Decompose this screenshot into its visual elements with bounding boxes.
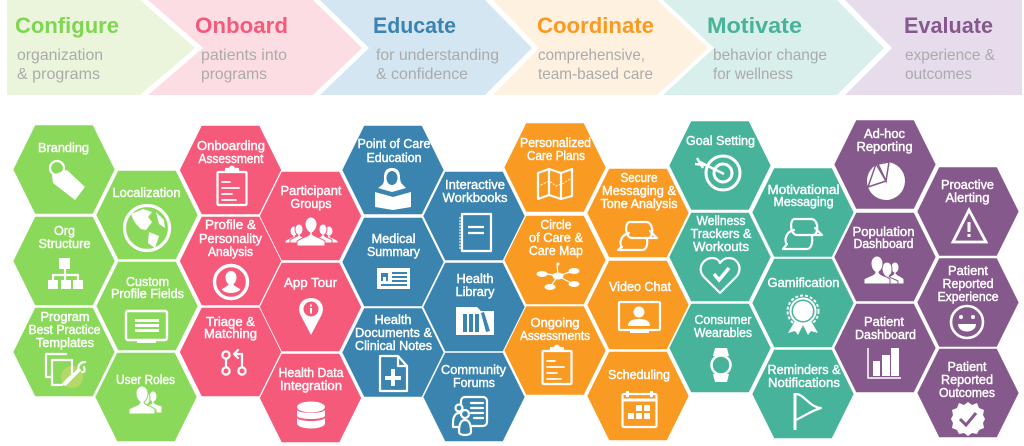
hexagon: Patient Reported Experience: Reported bbox=[942, 277, 994, 291]
chevron: Configure: organization bbox=[17, 47, 103, 64]
chevron: Motivate bbox=[663, 0, 884, 95]
hexagon: Point of Care Education bbox=[342, 126, 444, 214]
hexagon: Secure Messaging and Tone Analysis bbox=[587, 168, 689, 258]
chevron: Coordinate: Coordinate bbox=[537, 13, 654, 38]
icon: globe bbox=[124, 206, 170, 250]
hexagon: Triage and Matching bbox=[180, 308, 282, 396]
hexagon: Health Library: Library bbox=[456, 285, 495, 299]
hexagon: Proactive Alerting: Proactive bbox=[941, 178, 994, 192]
chevron: Coordinate: comprehensive, bbox=[538, 47, 645, 64]
hexagon: Triage and Matching: Matching bbox=[204, 327, 257, 341]
chevron: Coordinate: team-based care bbox=[538, 66, 653, 83]
icon: heart check bbox=[701, 258, 739, 293]
hexagon: Population Dashboard bbox=[834, 212, 936, 302]
hexagon: Program Best Practice Templates bbox=[13, 308, 115, 396]
hexagon: Patient Reported Outcomes: Patient bbox=[948, 360, 987, 374]
hexagon: Patient Reported Outcomes: Outcomes bbox=[939, 386, 995, 400]
icon: warning triangle bbox=[953, 210, 986, 242]
hexagon: Secure Messaging and Tone Analysis: Tone Analysis bbox=[600, 197, 678, 211]
hexagon: Program Best Practice Templates: Best Practice bbox=[28, 323, 101, 337]
icon: reader with book bbox=[375, 168, 411, 210]
hexagon: Personalized Care Plans bbox=[504, 123, 606, 212]
hexagon: Branding: Branding bbox=[38, 141, 89, 155]
hexagon: Circle of Care and Care Map: Care Map bbox=[529, 244, 583, 258]
hexagon: User Roles: User Roles bbox=[116, 373, 175, 387]
hexagon: Onboarding Assessment bbox=[180, 126, 282, 214]
hexagon: Health Documents and Clinical Notes: Documents & bbox=[355, 326, 433, 340]
hexagon: Gamification: Gamification bbox=[768, 276, 840, 290]
icon: org chart bbox=[48, 258, 83, 289]
hexagon: Medical Summary: Summary bbox=[367, 245, 421, 259]
hexagon: Patient Reported Experience: Patient bbox=[948, 264, 989, 278]
hexagon: Org Structure: Structure bbox=[38, 237, 91, 251]
hexagon: Point of Care Education: Education bbox=[366, 151, 422, 165]
icon: profile circle bbox=[214, 266, 248, 298]
hexagon: Scheduling: Scheduling bbox=[608, 368, 670, 382]
hexagon: Medical Summary bbox=[342, 218, 444, 306]
hexagon: Community Forums: Community bbox=[441, 363, 507, 377]
icon: ID card bbox=[377, 268, 410, 289]
icon: pie chart bbox=[867, 162, 905, 200]
hexagon: Consumer Wearables bbox=[669, 304, 771, 392]
icon: users bbox=[129, 386, 162, 414]
chevron: Evaluate: Evaluate bbox=[904, 13, 993, 38]
stage banner bbox=[7, 0, 1022, 95]
chevron: Educate: for understanding bbox=[376, 47, 499, 64]
chevron: Onboard bbox=[148, 0, 362, 95]
hexagon: Custom Profile Fields: Profile Fields bbox=[111, 287, 184, 301]
hexagon: Personalized Care Plans: Care Plans bbox=[527, 149, 585, 163]
chevron: Educate: & confidence bbox=[376, 66, 468, 83]
hexagon: Scheduling bbox=[587, 352, 689, 440]
chevron: Onboard: programs bbox=[201, 66, 267, 83]
icon: branch arrows bbox=[222, 350, 246, 375]
hexagon: Profile and Personality Analysis bbox=[180, 216, 282, 306]
chevron: Coordinate bbox=[493, 0, 708, 95]
hexagon: Patient Reported Outcomes bbox=[917, 348, 1019, 438]
panel: Coordinate hexagons bbox=[504, 123, 689, 440]
hexagon: Consumer Wearables: Consumer bbox=[694, 313, 752, 327]
hexagon: Video Chat: Video Chat bbox=[609, 280, 672, 294]
hexagon: Goal Setting: Goal Setting bbox=[686, 134, 755, 148]
icon: users bbox=[864, 256, 904, 284]
hexagon: Goal Setting bbox=[669, 121, 771, 210]
hexagon: Program Best Practice Templates: Program bbox=[40, 310, 90, 324]
hexagon: Ongoing Assessments: Assessments bbox=[520, 329, 590, 343]
icon: video monitor bbox=[619, 302, 660, 333]
hexagon: Patient Reported Experience: Experience bbox=[938, 290, 999, 304]
hexagon: Localization bbox=[96, 170, 198, 260]
icon: chat bubbles bbox=[783, 219, 822, 249]
icon: chat bubbles bbox=[618, 222, 657, 250]
chevron: Evaluate: experience & bbox=[905, 47, 995, 64]
hexagon: Health Data Integration bbox=[260, 354, 362, 442]
hexagon: Wellness Trackers and Workouts: Trackers & bbox=[690, 227, 752, 241]
icon: community forum bbox=[453, 397, 487, 435]
hexagon: Interactive Workbooks: Interactive bbox=[445, 178, 505, 192]
hexagon: Interactive Workbooks bbox=[423, 172, 525, 260]
panel: Configure hexagons bbox=[13, 125, 198, 442]
hexagon: Custom Profile Fields bbox=[96, 262, 198, 350]
chevron: Configure: & programs bbox=[17, 66, 100, 83]
icon: document with plus bbox=[380, 356, 407, 391]
hexagon: Org Structure bbox=[13, 216, 115, 306]
hexagon: Proactive Alerting bbox=[917, 167, 1019, 256]
icon: smiley bbox=[951, 306, 983, 338]
hexagon: Patient Reported Outcomes: Reported bbox=[941, 373, 993, 387]
hexagon: Population Dashboard: Dashboard bbox=[854, 237, 914, 251]
chevron: Evaluate: outcomes bbox=[905, 66, 972, 83]
hexagon: App Tour: App Tour bbox=[284, 276, 337, 290]
hexagon: Ongoing Assessments: Ongoing bbox=[530, 316, 580, 330]
hexagon: Wellness Trackers and Workouts: Workouts bbox=[693, 240, 749, 254]
hexagon: Health Data Integration: Health Data bbox=[278, 366, 344, 380]
icon: tag bbox=[50, 161, 85, 200]
hexagon: Patient Dashboard bbox=[834, 304, 936, 392]
hexagon: Localization: Localization bbox=[112, 186, 181, 200]
hexagon: Profile and Personality Analysis: Profile & bbox=[205, 218, 257, 232]
icon: bar chart bbox=[868, 348, 901, 378]
hexagon: Consumer Wearables: Wearables bbox=[694, 326, 752, 340]
panel: Educate hexagons bbox=[342, 126, 525, 442]
hexagon: Patient Dashboard: Patient bbox=[864, 315, 905, 329]
hexagon: Participant Groups: Participant bbox=[280, 184, 342, 198]
hexagon: Custom Profile Fields: Custom bbox=[126, 275, 169, 289]
chevron: Educate bbox=[320, 0, 532, 95]
hexagon: Motivational Messaging: Messaging bbox=[774, 195, 834, 209]
hexagon: Health Library: Health bbox=[456, 272, 494, 286]
hexagon: Circle of Care and Care Map bbox=[504, 216, 606, 304]
icon: database bbox=[297, 402, 325, 428]
icon: templates and wrench bbox=[46, 354, 85, 388]
hexagon: Population Dashboard: Population bbox=[852, 225, 915, 239]
hexagon: Community Forums bbox=[423, 352, 525, 442]
hexagon: Ad-hoc Reporting bbox=[834, 120, 936, 209]
hexagon: Reminders and Notifications bbox=[752, 350, 854, 438]
hexagon: Motivational Messaging bbox=[752, 168, 854, 257]
hexagon: Gamification bbox=[752, 258, 854, 348]
hexagon: Circle of Care and Care Map: Circle bbox=[540, 218, 572, 232]
hexagon: Program Best Practice Templates: Templates bbox=[36, 336, 94, 350]
chevron: Evaluate bbox=[845, 0, 1022, 95]
chevron: Motivate: for wellness bbox=[713, 66, 793, 83]
hexagon: Ongoing Assessments bbox=[504, 306, 606, 395]
icon: award ribbon bbox=[788, 296, 818, 335]
hexagon: Ad-hoc Reporting: Ad-hoc bbox=[864, 127, 905, 141]
hexagon: Onboarding Assessment: Assessment bbox=[198, 152, 264, 166]
icon: care map hub bbox=[536, 262, 580, 290]
hexagon: Org Structure: Org bbox=[54, 224, 75, 238]
hexagon: Circle of Care and Care Map: of Care & bbox=[529, 231, 584, 245]
hexagon: Patient Reported Experience bbox=[917, 258, 1019, 347]
hexagon: Reminders and Notifications: Reminders & bbox=[768, 363, 841, 377]
panel: Onboard hexagons bbox=[180, 126, 362, 442]
hexagon: Health Documents and Clinical Notes bbox=[342, 308, 444, 397]
icon: clipboard bbox=[218, 167, 246, 205]
chevron: Motivate: behavior change bbox=[713, 47, 827, 64]
hexagon: User Roles bbox=[95, 352, 197, 442]
icon: calendar bbox=[622, 391, 656, 427]
hexagon: Interactive Workbooks: Workbooks bbox=[442, 191, 508, 205]
icon: group of people bbox=[285, 217, 338, 246]
hexagon: Health Documents and Clinical Notes: Health bbox=[374, 313, 412, 327]
hexagon: Proactive Alerting: Alerting bbox=[946, 191, 990, 205]
hexagon: Onboarding Assessment: Onboarding bbox=[197, 139, 265, 153]
panel: Evaluate hexagons bbox=[834, 120, 1019, 438]
icon: location pin bbox=[299, 298, 323, 335]
hexagon: Profile and Personality Analysis: Analysis bbox=[208, 245, 253, 259]
icon: verified seal bbox=[951, 402, 985, 436]
hexagon: Health Data Integration: Integration bbox=[280, 379, 342, 393]
chevron: Motivate: Motivate bbox=[707, 13, 802, 38]
chevron: Educate: Educate bbox=[373, 13, 456, 38]
panel: Motivate hexagons bbox=[669, 121, 854, 438]
hexagon: Reminders and Notifications: Notifications bbox=[768, 376, 840, 390]
hexagon: Secure Messaging and Tone Analysis: Messaging & bbox=[602, 184, 677, 198]
chevron: Configure: Configure bbox=[15, 13, 119, 38]
icon: clipboard bbox=[542, 346, 572, 384]
hexagon: Wellness Trackers and Workouts: Wellness bbox=[696, 214, 746, 228]
icon: map bbox=[538, 169, 572, 199]
hexagon: Profile and Personality Analysis: Personality bbox=[199, 232, 263, 246]
chevron: Onboard: Onboard bbox=[195, 13, 288, 38]
icon: library books bbox=[456, 307, 494, 335]
icon: monitor form bbox=[126, 311, 167, 343]
hexagon: Community Forums: Forums bbox=[453, 376, 495, 390]
chevron: Onboard: patients into bbox=[201, 47, 287, 64]
icon: flag bbox=[795, 393, 821, 430]
hexagon: Motivational Messaging: Motivational bbox=[768, 183, 840, 197]
hexagon: Participant Groups bbox=[260, 172, 362, 260]
icon: notebook bbox=[459, 214, 491, 251]
hexagon: Health Documents and Clinical Notes: Clinical Notes bbox=[355, 339, 432, 353]
hexagon: Participant Groups: Groups bbox=[290, 197, 332, 211]
hexagon: Ad-hoc Reporting: Reporting bbox=[856, 140, 913, 154]
hexagon: Patient Dashboard: Dashboard bbox=[855, 328, 916, 342]
hexagon: Medical Summary: Medical bbox=[372, 232, 416, 246]
hexagon: Branding bbox=[13, 125, 115, 214]
hexagon: Point of Care Education: Point of Care bbox=[358, 137, 431, 151]
icon: smartwatch bbox=[712, 348, 730, 382]
chevron: Configure bbox=[7, 0, 195, 95]
hexagon: Video Chat bbox=[587, 260, 689, 350]
hexagon: Secure Messaging and Tone Analysis: Secure bbox=[620, 171, 658, 185]
icon: target with arrow bbox=[695, 156, 740, 190]
hexagon: Triage and Matching: Triage & bbox=[206, 315, 256, 329]
hexagon: Personalized Care Plans: Personalized bbox=[520, 136, 591, 150]
hexagon: Health Library bbox=[423, 262, 525, 352]
hexagon: App Tour bbox=[260, 262, 362, 352]
hexagon: Wellness Trackers and Workouts bbox=[669, 212, 771, 302]
